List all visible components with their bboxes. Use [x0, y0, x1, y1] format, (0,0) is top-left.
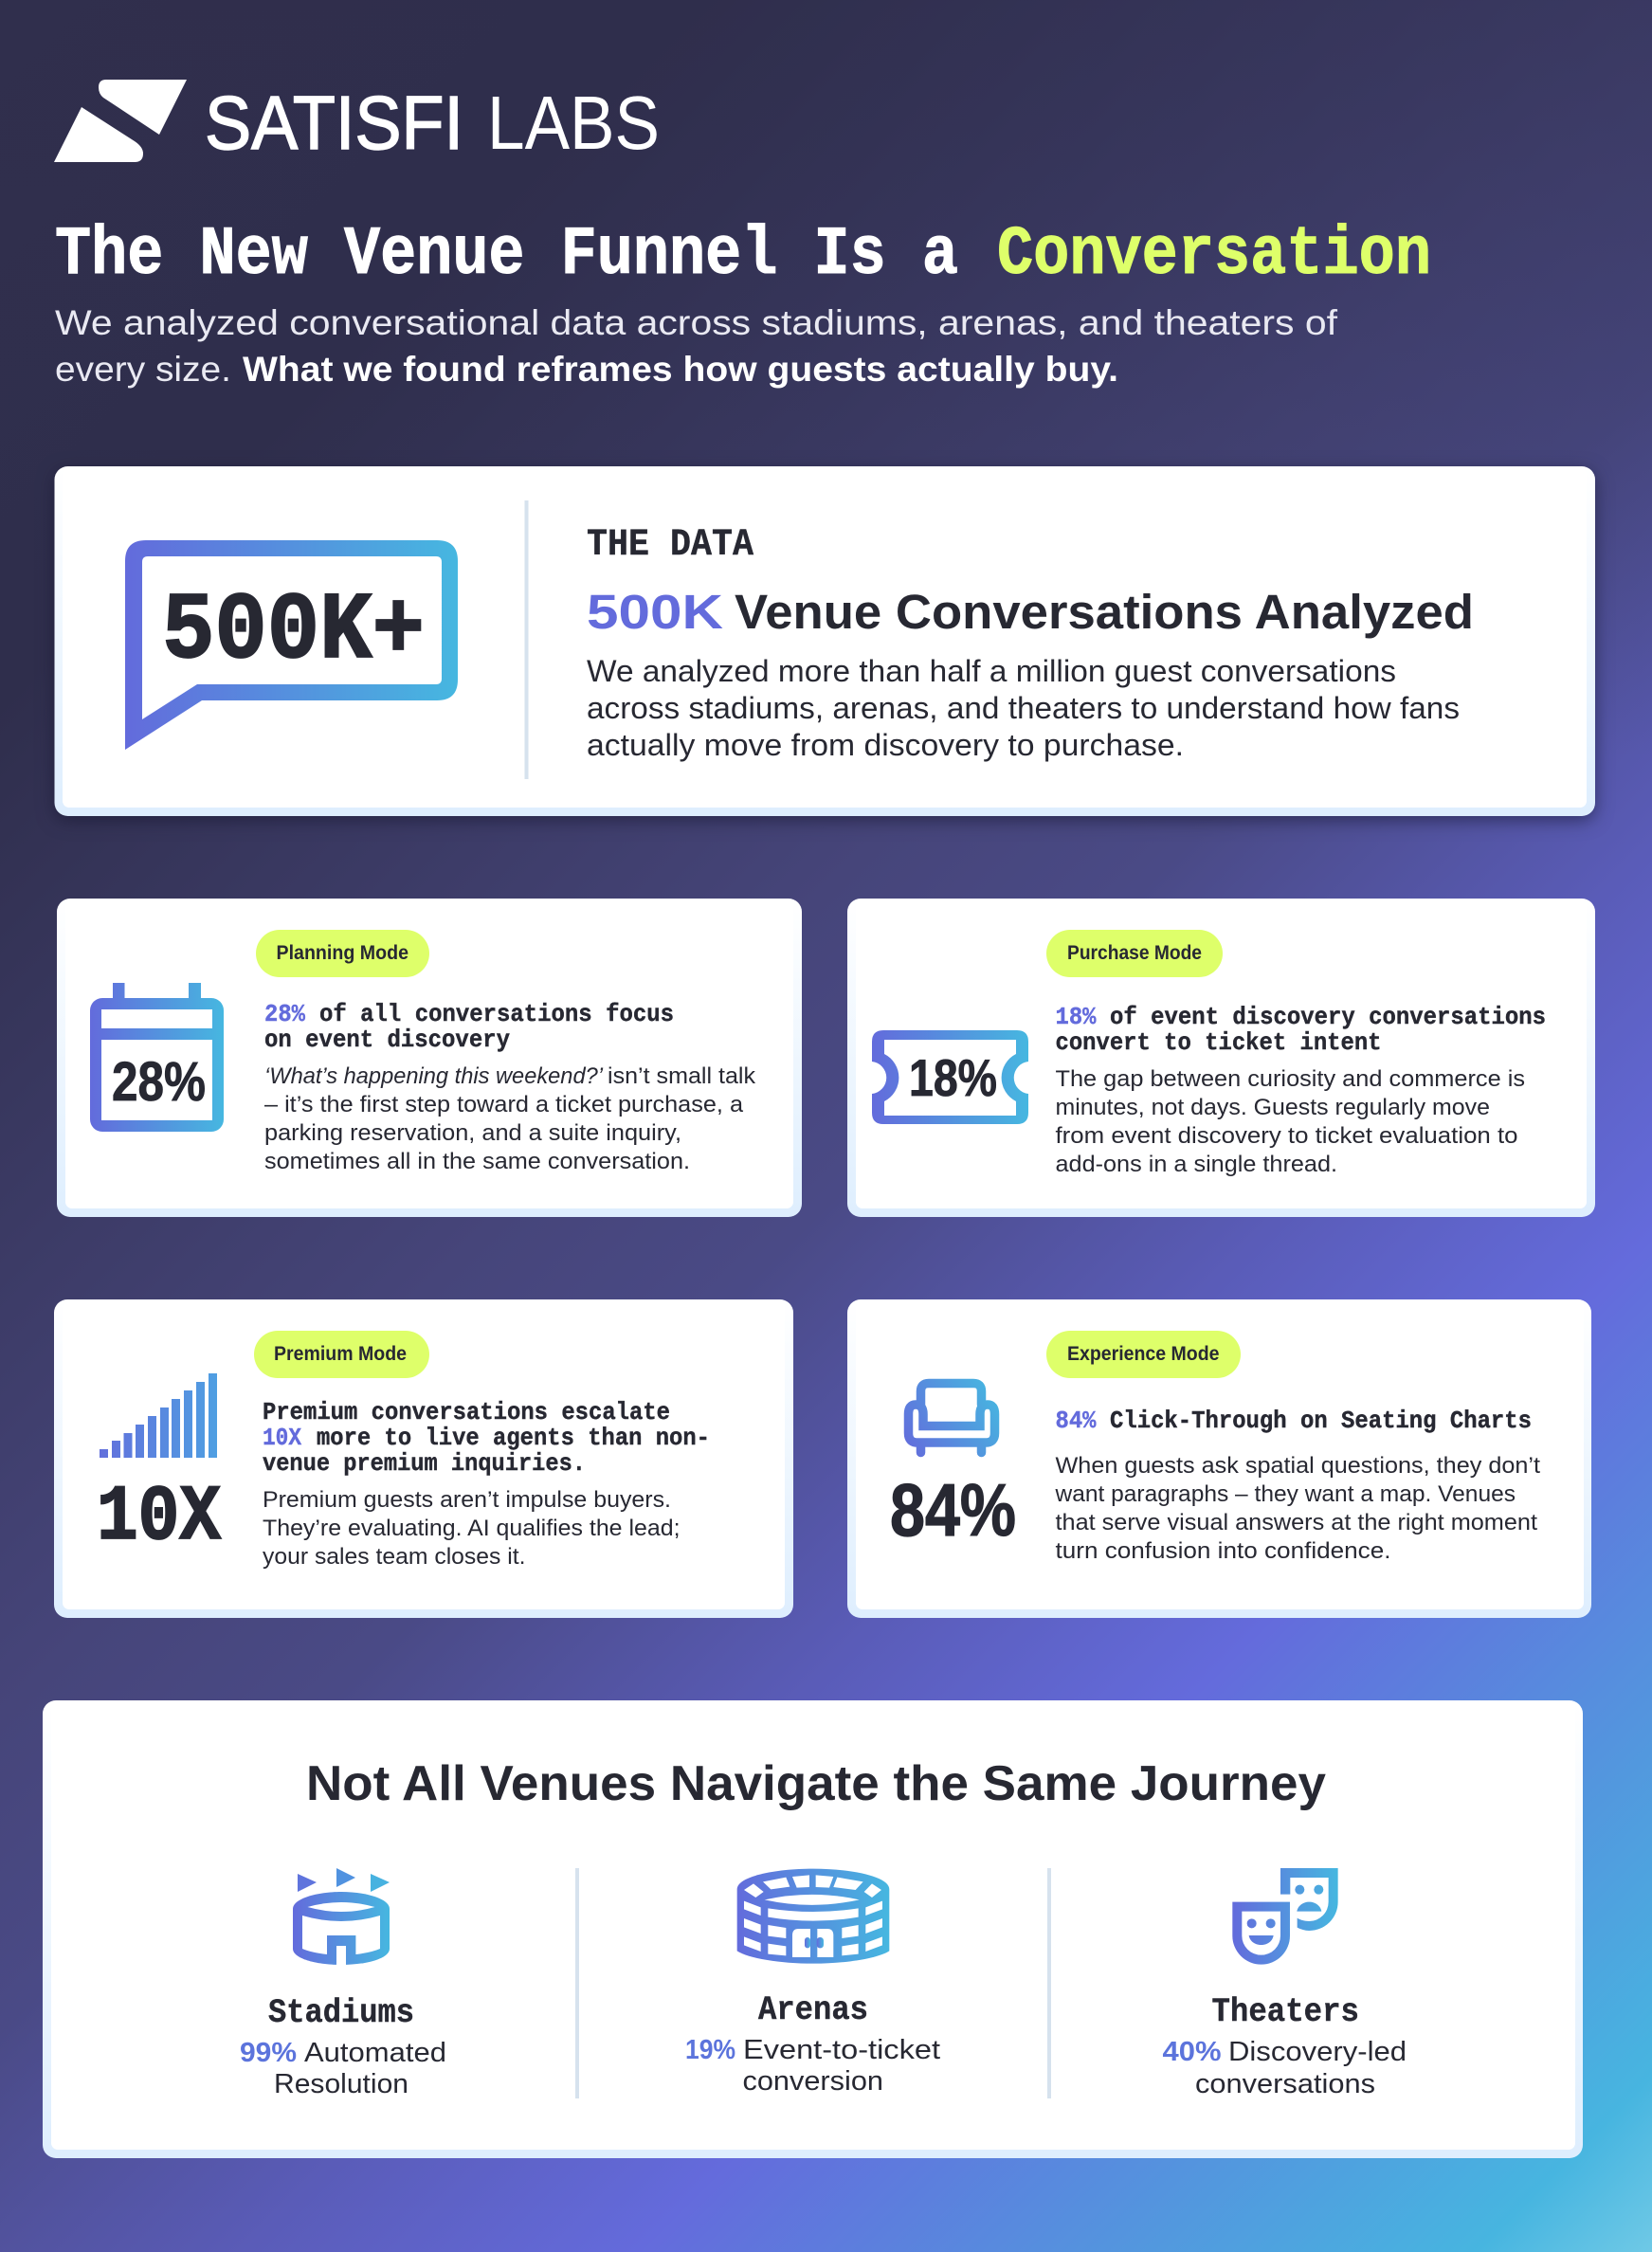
stat: 99% automated resolution: Resolution [274, 2069, 408, 2099]
text block: purchase mode: The gap between curiosity and commerce is [1056, 1066, 1525, 1092]
icon: logo mark [54, 80, 187, 162]
heading: 28% event discovery: of all conversations focus [319, 1000, 674, 1028]
stat: 40% discovery-led conversations [1162, 2037, 1407, 2099]
badge: experience mode: Experience Mode [1067, 1343, 1219, 1365]
column: stadiums [240, 1868, 446, 2099]
icon: arena [737, 1869, 889, 1964]
stat: 19% event-to-ticket conversion: conversion [743, 2066, 883, 2097]
label: stadiums: Stadiums [268, 1994, 414, 2032]
stat: 40% discovery-led conversations: 40% [1162, 2037, 1222, 2067]
panel: planning mode [57, 899, 802, 1217]
badge: purchase mode: Purchase Mode [1067, 942, 1202, 964]
text block: experience mode: turn confusion into confidence. [1056, 1538, 1391, 1564]
icon: speech bubble with 500K+ [125, 540, 458, 750]
text block: purchase mode: minutes, not days. Guests regularly move [1056, 1095, 1490, 1120]
text block: planning mode [264, 1063, 756, 1174]
panel: purchase mode [847, 899, 1595, 1217]
subtitle [55, 303, 1338, 389]
heading: 28% event discovery: on event discovery [264, 1026, 510, 1054]
icon: calendar 28%: 28% [112, 1051, 206, 1113]
heading: 18% ticket intent: convert to ticket intent [1056, 1028, 1382, 1057]
heading: 28% event discovery [264, 1000, 674, 1054]
heading: 18% ticket intent: of event discovery conversations [1110, 1003, 1546, 1031]
column: arenas [685, 1869, 940, 2097]
stat: 19% event-to-ticket conversion: Event-to-ticket [743, 2035, 940, 2065]
text block: planning mode: isn’t small talk [608, 1063, 756, 1089]
subtitle: We analyzed conversational data across stadiums, arenas, and theaters of [55, 303, 1338, 342]
panel: the data [55, 466, 1595, 816]
panel: venue journeys [43, 1700, 1583, 2158]
heading: 28% event discovery: 28% [264, 1000, 305, 1028]
text block: the data description: across stadiums, arenas, and theaters to understand how fans [587, 691, 1460, 725]
chart: rising bars [100, 1373, 217, 1458]
badge: planning mode [256, 930, 429, 977]
logo: Satisfi Labs [54, 80, 660, 165]
text block: premium mode: your sales team closes it. [263, 1544, 525, 1570]
stat: 40% discovery-led conversations: conversations [1195, 2069, 1375, 2099]
text block: premium mode: Premium guests aren’t impulse buyers. [263, 1487, 671, 1513]
text block: planning mode: parking reservation, and a suite inquiry, [264, 1120, 681, 1146]
label: the data: THE DATA [587, 524, 753, 567]
text block: experience mode: want paragraphs – they want a map. Venues [1054, 1481, 1516, 1507]
text block: planning mode: – it’s the first step toward a ticket purchase, a [264, 1092, 743, 1117]
stat: 19% event-to-ticket conversion [685, 2035, 940, 2097]
subtitle: What we found reframes how guests actually buy. [243, 350, 1118, 389]
heading: not all venues: Not All Venues Navigate the Same Journey [306, 1756, 1326, 1811]
badge: premium mode [254, 1331, 429, 1378]
text block: experience mode: that serve visual answers at the right moment [1056, 1510, 1537, 1535]
label: theaters: Theaters [1211, 1993, 1359, 2031]
badge: purchase mode [1046, 930, 1223, 977]
column: theaters [1162, 1868, 1407, 2099]
icon: ticket 18%: 18% [909, 1048, 997, 1107]
heading: premium escalation [263, 1398, 710, 1478]
text block: purchase mode: from event discovery to ticket evaluation to [1056, 1123, 1518, 1149]
stat: 19% event-to-ticket conversion: 19% [685, 2035, 735, 2065]
icon: speech bubble with 500K+: 500K+ [162, 579, 425, 686]
stat: 10X: 10X [97, 1473, 221, 1562]
icon: theater masks [1232, 1868, 1338, 1965]
icon: armchair [908, 1384, 995, 1452]
text block: premium mode [263, 1487, 681, 1570]
heading: premium escalation: more to live agents than non- [317, 1424, 710, 1452]
heading: 500K venue conversations analyzed: 500K [587, 585, 723, 639]
stat: 99% automated resolution: Automated [304, 2038, 446, 2068]
stat: 99% automated resolution: 99% [240, 2038, 297, 2068]
icon: ticket 18% [872, 1030, 1028, 1124]
logo wordmark: SATISFI [205, 81, 463, 165]
badge: planning mode: Planning Mode [277, 942, 408, 964]
heading: 18% ticket intent [1056, 1003, 1546, 1057]
label: arenas: Arenas [758, 1991, 868, 2029]
title: The New Venue Funnel Is a [55, 216, 958, 294]
stat: 40% discovery-led conversations: Discovery-led [1228, 2037, 1407, 2067]
subtitle: every size. [55, 350, 231, 389]
text block: experience mode [1054, 1453, 1540, 1564]
text block: the data description [587, 654, 1460, 762]
heading: premium escalation: Premium conversations escalate [263, 1398, 670, 1426]
logo wordmark [205, 81, 660, 165]
heading: 84% click-through: 84% [1056, 1407, 1097, 1435]
icon: stadium [293, 1868, 390, 1967]
text block: the data description: We analyzed more than half a million guest conversations [587, 654, 1396, 688]
text block: experience mode: When guests ask spatial questions, they don’t [1056, 1453, 1540, 1479]
stat: 99% automated resolution [240, 2038, 446, 2099]
heading: premium escalation: venue premium inquiries. [263, 1449, 586, 1478]
panel: premium mode [54, 1299, 793, 1618]
badge: premium mode: Premium Mode [274, 1343, 407, 1365]
stat: 84%: 84% [890, 1468, 1016, 1552]
badge: experience mode [1046, 1331, 1241, 1378]
heading: premium escalation: 10X [263, 1424, 301, 1452]
title: Conversation [997, 216, 1431, 294]
text block: premium mode: They’re evaluating. AI qualifies the lead; [263, 1516, 681, 1541]
logo wordmark: LABS [487, 81, 660, 165]
icon: calendar 28% [90, 983, 224, 1132]
heading: 500K venue conversations analyzed: Venue Conversations Analyzed [735, 585, 1474, 639]
text block: planning mode: sometimes all in the same conversation. [264, 1149, 690, 1174]
text block: planning mode: ‘What’s happening this weekend?’ [264, 1063, 604, 1089]
heading: 84% click-through: Click-Through on Seating Charts [1110, 1407, 1532, 1435]
panel: experience mode [847, 1299, 1591, 1618]
text block: purchase mode: add-ons in a single thread. [1056, 1152, 1337, 1177]
text block: the data description: actually move from discovery to purchase. [587, 728, 1184, 762]
heading: 18% ticket intent: 18% [1056, 1003, 1097, 1031]
text block: purchase mode [1056, 1066, 1525, 1177]
